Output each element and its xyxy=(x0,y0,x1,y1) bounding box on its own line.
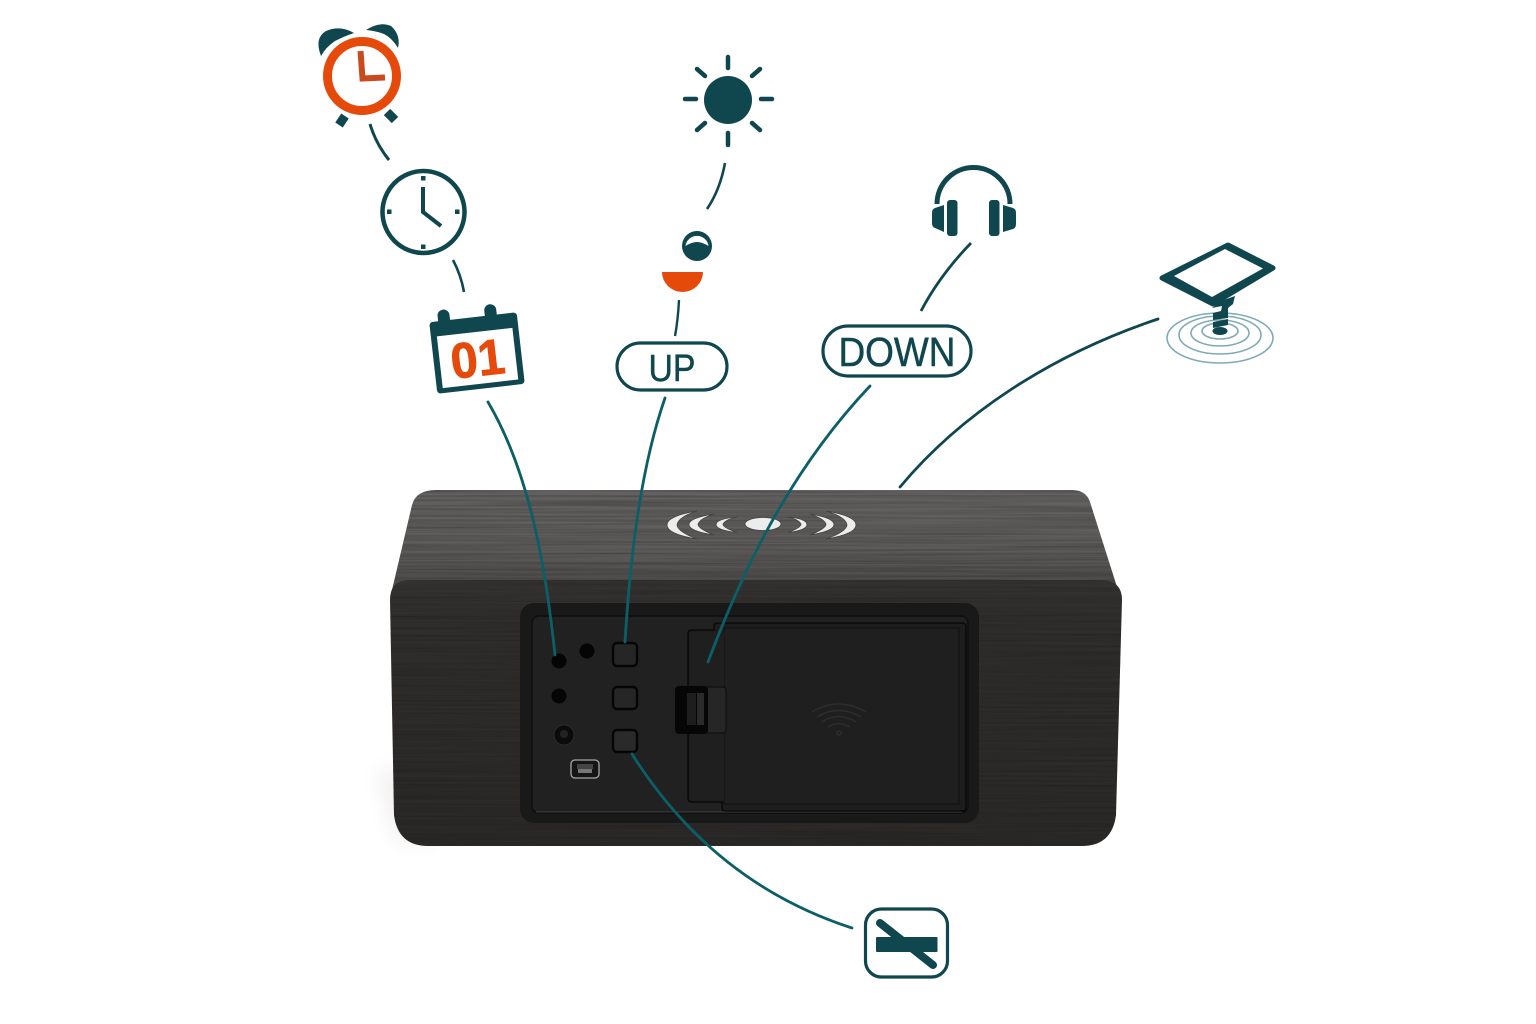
wireless mark on cover xyxy=(812,704,866,735)
label: UP button xyxy=(617,343,727,390)
battery cover xyxy=(688,623,966,811)
device shadow xyxy=(376,770,440,842)
icon: brightness dial xyxy=(682,231,712,261)
rear control panel xyxy=(520,603,979,823)
device: wooden clock body xyxy=(385,485,1125,850)
infographic: clock rear controls diagram xyxy=(318,24,1276,979)
top face of clock xyxy=(392,490,1116,590)
leader line: tablet to clock top xyxy=(900,319,1158,487)
leader line: headphones to DOWN xyxy=(921,243,971,311)
USB port xyxy=(571,760,599,778)
leader line: bottom button to snooze icon xyxy=(632,754,852,928)
icon: calendar 01 xyxy=(428,301,525,394)
label: UP button: UP xyxy=(648,348,696,390)
front face of clock xyxy=(385,575,1125,850)
icon: calendar 01: 01 xyxy=(448,328,508,390)
leader line: brightness to UP xyxy=(675,300,679,336)
icon: alarm clock xyxy=(318,24,399,125)
button: bottom xyxy=(613,730,637,752)
wireless charging logo xyxy=(667,511,856,539)
leader line: alarm to clock xyxy=(370,124,389,160)
icon: tablet on wireless pad xyxy=(1162,245,1273,363)
hole: left top xyxy=(552,654,566,668)
hole: left middle xyxy=(552,688,566,704)
tablet stand xyxy=(1212,296,1235,335)
label: DOWN button: DOWN xyxy=(838,329,956,375)
leader line: sun to brightness xyxy=(707,163,725,209)
icon: snooze off xyxy=(866,909,948,977)
button: top xyxy=(613,643,637,666)
icon: headphones xyxy=(932,168,1016,236)
leader line: DOWN to battery cover xyxy=(708,386,870,662)
battery cover latch xyxy=(675,686,726,734)
tablet xyxy=(1162,245,1273,304)
icon: orange half circle xyxy=(662,272,703,292)
audio jack xyxy=(554,725,574,745)
leader line: UP to top button xyxy=(625,398,665,642)
hole: right top xyxy=(580,644,594,658)
button: middle xyxy=(613,687,637,709)
icon: wall clock xyxy=(382,171,464,253)
charging rings xyxy=(1167,313,1273,363)
leader line: clock to calendar xyxy=(453,260,464,292)
leader line: calendar to hole xyxy=(488,402,555,655)
icon: sun xyxy=(685,57,772,145)
